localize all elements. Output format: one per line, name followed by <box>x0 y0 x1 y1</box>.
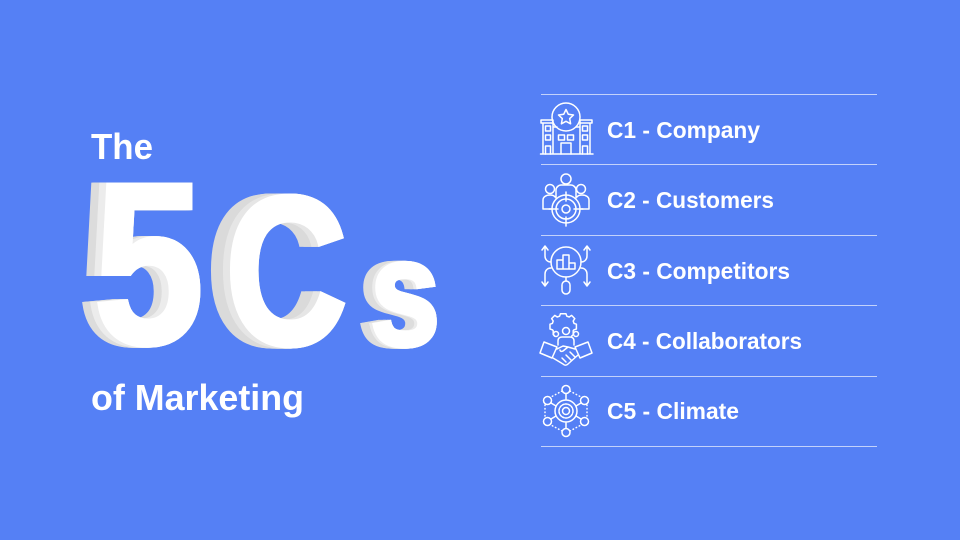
label: C2 - Customers: C2 - Customers <box>607 187 774 213</box>
title: 5Cs 3D lettering: s <box>370 208 440 378</box>
title: 5Cs 3D lettering: C <box>225 152 347 389</box>
title: 5Cs 3D lettering: 5 <box>93 134 204 393</box>
label: C1 - Company: C1 - Company <box>607 117 760 143</box>
icon: customers target <box>543 174 589 226</box>
icon: company building <box>540 103 593 154</box>
heading: The: The <box>91 126 153 167</box>
title: 5Cs 3D lettering <box>93 134 440 393</box>
icon: climate network <box>544 386 588 436</box>
heading: of Marketing: of Marketing <box>91 377 304 418</box>
divider lines <box>541 94 877 446</box>
label: C5 - Climate: C5 - Climate <box>607 398 739 424</box>
label: C4 - Collaborators: C4 - Collaborators <box>607 328 802 354</box>
icon: collaborators gear and handshake <box>540 314 592 365</box>
icon: competitors magnifier <box>542 246 590 294</box>
label: C3 - Competitors: C3 - Competitors <box>607 258 790 284</box>
